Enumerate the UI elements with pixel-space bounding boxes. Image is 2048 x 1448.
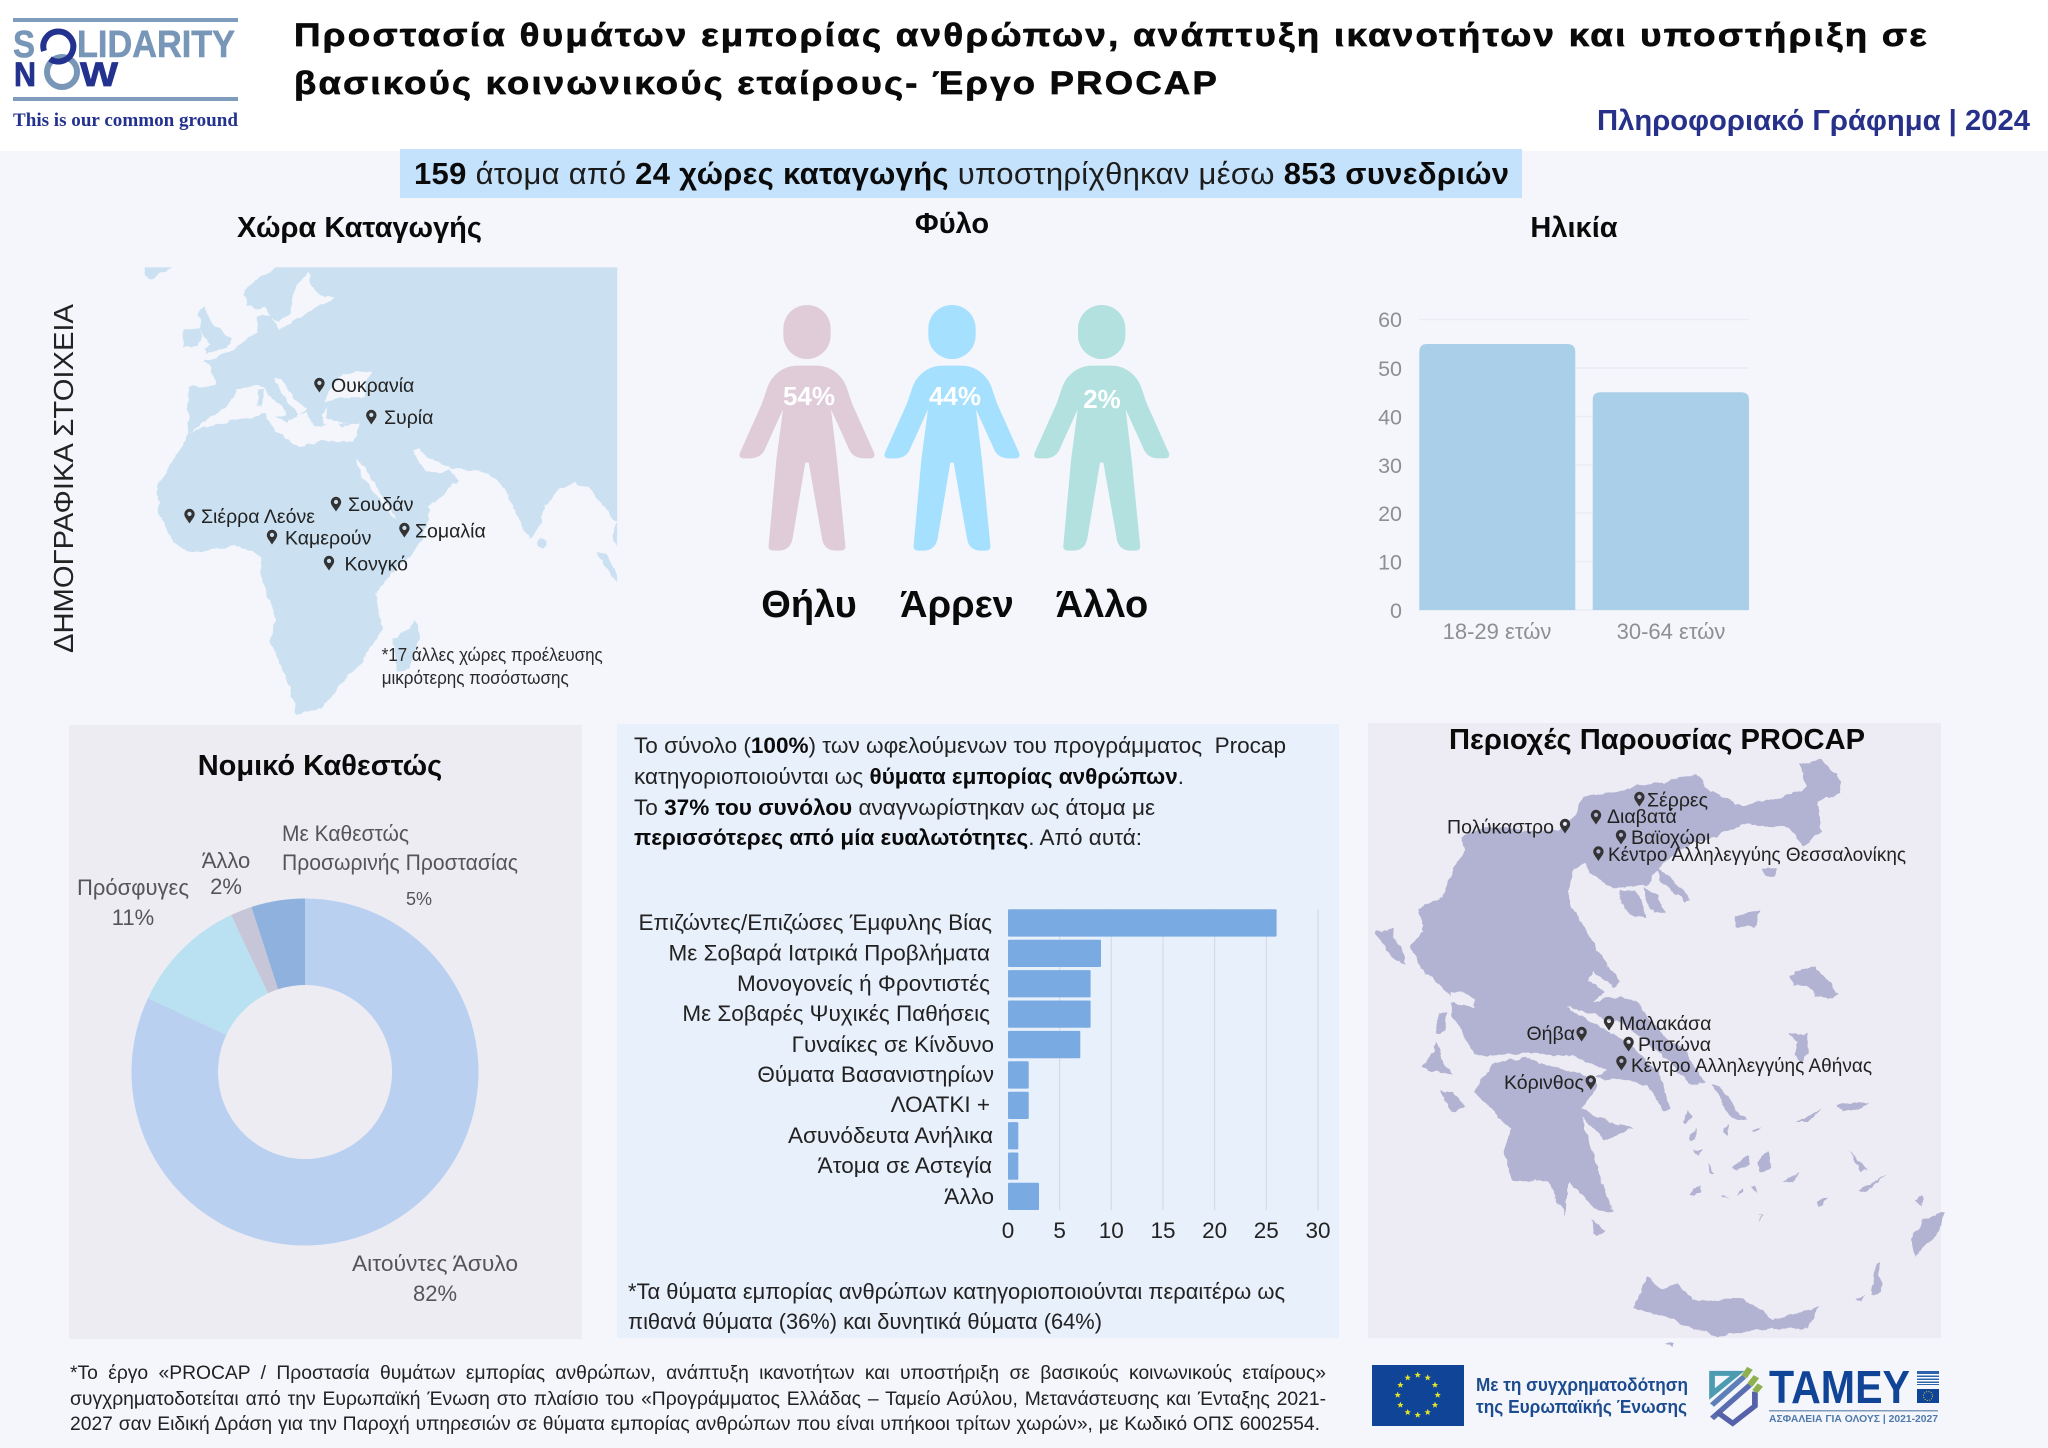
world map pins and country labels: Σομαλία — [415, 520, 486, 542]
logo: SolidarityNow: This is our common ground — [13, 110, 238, 131]
TAMEY logo: ΑΣΦΑΛΕΙΑ ΓΙΑ ΟΛΟΥΣ | 2021-2027 — [1769, 1413, 1938, 1425]
heading: country of origin: Χώρα Καταγωγής — [237, 212, 482, 244]
bar chart: vulnerabilities: 20 — [1202, 1218, 1227, 1243]
logo: SolidarityNow: N — [14, 56, 36, 94]
donut labels: 11% — [112, 905, 154, 930]
bar chart: vulnerabilities: 0 — [1002, 1218, 1014, 1243]
heading: age: Ηλικία — [1530, 212, 1618, 244]
donut labels: Με Καθεστώς — [282, 821, 409, 846]
map of Greece — [1375, 759, 1946, 1347]
header background — [0, 0, 2048, 151]
heading: gender: Φύλο — [915, 208, 989, 240]
bar chart: vulnerabilities: Άλλο — [944, 1184, 994, 1209]
footnote: project funding: συγχρηματοδοτείται από την Ευρωπαϊκή Ένωση στο πλαίσιο του «Προγράμματος Ελλάδας – Ταμείο Ασύλου, Μετανάστευσης και Ένταξης 2021- — [70, 1389, 1326, 1410]
donut labels: 2% — [210, 874, 242, 899]
figure: female 54% — [740, 305, 874, 626]
chart footnote: πιθανά θύματα (36%) και δυνητικά θύματα (64%) — [628, 1309, 1102, 1334]
donut labels: 82% — [413, 1281, 457, 1306]
heading: legal status: Νομικό Καθεστώς — [198, 750, 442, 782]
bar chart: vulnerabilities: ΛΟΑΤΚΙ + — [891, 1092, 990, 1117]
banner: key figures — [400, 149, 1522, 198]
logo: SolidarityNow: W — [80, 56, 119, 94]
bar chart: age: 40 — [1378, 406, 1402, 430]
bar chart: vulnerabilities: 5 — [1053, 1218, 1066, 1243]
figure: other 2%: Άλλο — [1056, 584, 1148, 626]
bar chart: vulnerabilities: Άτομα σε Αστεγία — [818, 1153, 992, 1178]
section side label: demographics: ΔΗΜΟΓΡΑΦΙΚΑ ΣΤΟΙΧΕΙΑ — [48, 304, 79, 653]
figure: other 2% — [1034, 305, 1169, 626]
bar chart: age: 20 — [1378, 502, 1402, 526]
world map pins and country labels: Καμερούν — [285, 528, 371, 550]
footnote: project funding — [70, 1363, 1326, 1435]
gender figures — [740, 305, 1169, 626]
world map pins and country labels: Κονγκό — [344, 554, 408, 576]
Greece pins and location labels: Κέντρο Αλληλεγγύης Θεσσαλονίκης — [1608, 844, 1906, 866]
world map — [141, 263, 620, 714]
title: Προστασία θυμάτων εμπορίας ανθρώπων, ανάπτυξη ικανοτήτων και υποστήριξη σε — [294, 17, 1929, 53]
figure: male 44% — [885, 305, 1019, 626]
logo: SolidarityNow: LIDARITY — [77, 24, 235, 66]
Greece pins and location labels: Ριτσώνα — [1638, 1034, 1711, 1056]
bar chart: vulnerabilities: Με Σοβαρές Ψυχικές Παθήσεις — [682, 1001, 990, 1026]
footnote: project funding: 2027 σαν Ειδική Δράση για την Παροχή υπηρεσιών σε θύματα εμπορίας ανθρώπων που είναι υπήκοοι τρίτων χωρών», με Κωδικό ΟΠΣ 6002554. — [70, 1414, 1320, 1435]
world map pins and country labels: Ουκρανία — [331, 375, 414, 397]
world map pins and country labels — [184, 375, 486, 576]
bar chart: age: 30 — [1378, 454, 1402, 478]
bar chart: age: 50 — [1378, 357, 1402, 381]
panel: legal status — [69, 725, 582, 1339]
Greece pins and location labels: Διαβατά — [1607, 806, 1677, 828]
donut labels: 5% — [406, 889, 432, 909]
donut labels: Πρόσφυγες — [77, 875, 189, 900]
map note: other countries: μικρότερης ποσόστωσης — [382, 668, 569, 688]
logo: SolidarityNow — [13, 18, 238, 131]
map note: other countries: *17 άλλες χώρες προέλευσης — [382, 645, 603, 665]
bar chart: vulnerabilities — [638, 909, 1331, 1243]
bar chart: age: 60 — [1378, 308, 1402, 332]
donut chart — [131, 898, 478, 1246]
world map pins and country labels: Σιέρρα Λεόνε — [201, 506, 315, 528]
figure: female 54%: Θήλυ — [761, 584, 857, 626]
bar chart: vulnerabilities: Ασυνόδευτα Ανήλικα — [788, 1123, 993, 1148]
banner: key figures: 159 άτομα από 24 χώρες καταγωγής υποστηρίχθηκαν μέσω 853 συνεδριών — [414, 156, 1509, 191]
Greece pins and location labels: Θήβα — [1526, 1023, 1575, 1045]
Greece pins and location labels: Κόρινθος — [1504, 1072, 1584, 1094]
bar chart: age: 0 — [1390, 599, 1402, 623]
panel: vulnerabilities — [617, 724, 1339, 1338]
map note: other countries — [382, 645, 603, 688]
bar chart: vulnerabilities: Γυναίκες σε Κίνδυνο — [792, 1032, 994, 1057]
bar chart: vulnerabilities: Με Σοβαρά Ιατρικά Προβλήματα — [669, 940, 990, 966]
chart footnote: *Τα θύματα εμπορίας ανθρώπων κατηγοριοποιούνται περαιτέρω ως — [628, 1279, 1285, 1304]
intro text — [634, 733, 1286, 850]
EU co-funding emblem — [1372, 1365, 1688, 1426]
title — [294, 17, 1929, 101]
intro text: Το σύνολο (100%) των ωφελούμενων του προγράμματος Procap — [634, 733, 1286, 758]
bar chart: age — [1378, 308, 1749, 644]
figure: male 44%: Άρρεν — [900, 584, 1014, 626]
TAMEY logo — [1712, 1361, 1939, 1425]
footnote: project funding: *Το έργο «PROCAP / Προστασία θυμάτων εμπορίας ανθρώπων, ανάπτυξη ικανοτήτων και υποστήριξη σε βασικούς κοινωνικούς εταίρους» — [70, 1363, 1326, 1384]
bar chart: age: 18-29 ετών — [1443, 619, 1551, 644]
donut labels: Αιτούντες Άσυλο — [352, 1251, 518, 1276]
bar chart: vulnerabilities: Επιζώντες/Επιζώσες Έμφυλης Βίας — [638, 910, 992, 935]
heading: presence areas: Περιοχές Παρουσίας PROCAP — [1449, 724, 1865, 756]
title: βασικούς κοινωνικούς εταίρους- Έργο PROCAP — [294, 65, 1219, 101]
bar chart: vulnerabilities: 10 — [1099, 1218, 1124, 1243]
panel: PROCAP presence in Greece — [1368, 723, 1946, 1347]
donut labels — [77, 821, 518, 1306]
logo: SolidarityNow: S — [13, 24, 35, 66]
figure: female 54%: 54% — [783, 381, 835, 411]
Greece pins and location labels: Βαϊοχώρι — [1631, 827, 1710, 849]
intro text: Το 37% του συνόλου αναγνωρίστηκαν ως άτομα με — [634, 795, 1155, 820]
Greece pins and location labels: Μαλακάσα — [1619, 1013, 1711, 1035]
chart footnote — [628, 1279, 1285, 1334]
EU co-funding emblem: της Ευρωπαϊκής Ένωσης — [1476, 1396, 1687, 1417]
donut labels: Άλλο — [202, 848, 250, 873]
Greece pins and location labels: Σέρρες — [1647, 790, 1708, 812]
world map pins and country labels: Σουδάν — [348, 494, 413, 516]
TAMEY logo: ΤΑΜΕΥ — [1769, 1361, 1910, 1413]
figure: male 44%: 44% — [929, 381, 981, 411]
bar chart: vulnerabilities: 25 — [1254, 1218, 1279, 1243]
donut labels: Προσωρινής Προστασίας — [282, 850, 518, 875]
world map pins and country labels: Συρία — [384, 407, 433, 429]
Greece pins and location labels: Πολύκαστρο — [1447, 816, 1554, 838]
subtitle: infographic year: Πληροφοριακό Γράφημα | 2024 — [1597, 105, 2030, 137]
bar chart: age: 10 — [1378, 550, 1402, 574]
Greece pins and location labels — [1447, 790, 1906, 1094]
bar chart: vulnerabilities: Μονογονείς ή Φροντιστές — [737, 971, 990, 996]
figure: other 2%: 2% — [1083, 384, 1121, 414]
intro text: περισσότερες από μία ευαλωτότητες. Από αυτά: — [634, 825, 1142, 850]
bar chart: vulnerabilities: 15 — [1150, 1218, 1176, 1243]
bar chart: vulnerabilities: Θύματα Βασανιστηρίων — [757, 1062, 994, 1087]
Greece pins and location labels: Κέντρο Αλληλεγγύης Αθήνας — [1631, 1055, 1872, 1077]
bar chart: age: 30-64 ετών — [1617, 619, 1725, 644]
EU co-funding emblem: Με τη συγχρηματοδότηση — [1476, 1374, 1688, 1395]
intro text: κατηγοριοποιούνται ως θύματα εμπορίας ανθρώπων. — [634, 764, 1184, 789]
bar chart: vulnerabilities: 30 — [1305, 1218, 1331, 1243]
